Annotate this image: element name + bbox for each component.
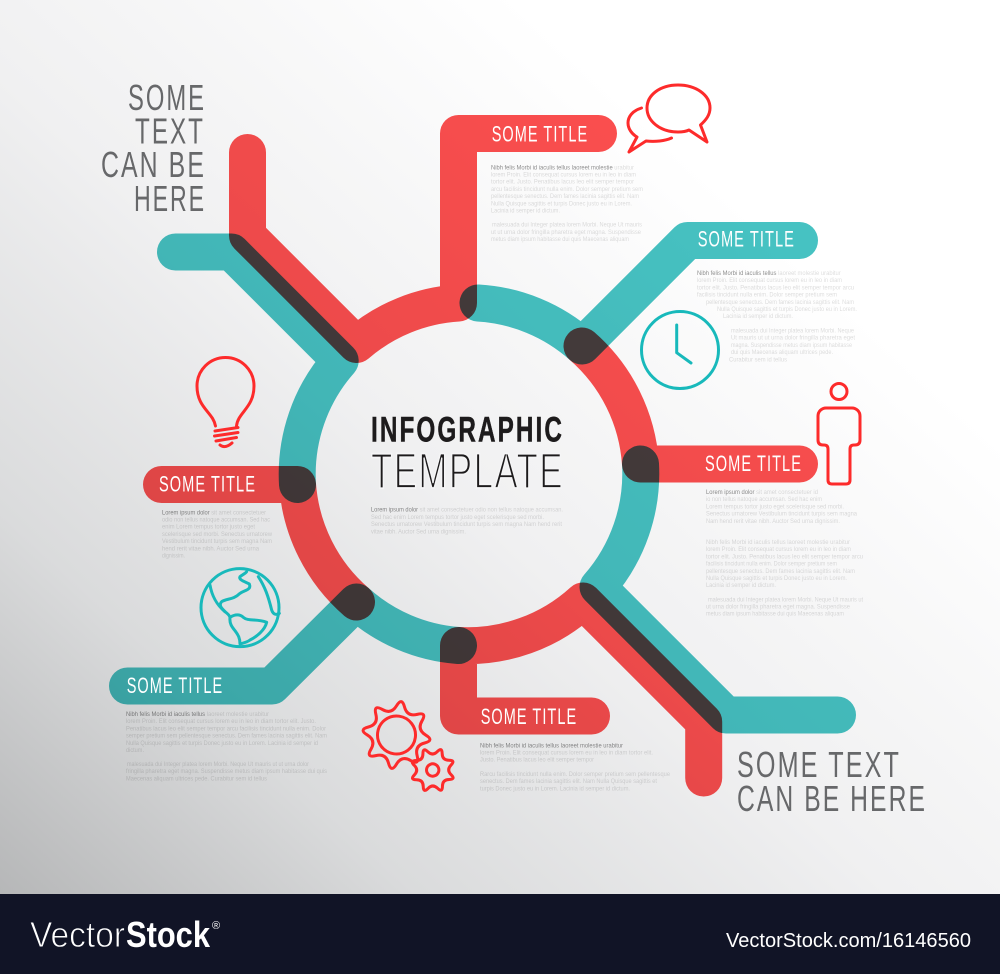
body text: Nibh felis Morbi id iaculis tellus laoreet molestie urabitur <box>697 270 841 277</box>
body text second block: Nulla Quisque sagittis et turpis Donec justo eu in Lorem. <box>706 575 847 582</box>
body text: Ut mauris ut ut urna dolor fringilla pharetra eget <box>731 335 855 342</box>
icon: light bulb <box>197 358 254 447</box>
body text: malesuada dui Integer platea lorem Morbi. Neque Ut mauris <box>492 222 642 229</box>
body text: facilisis tincidunt nulla enim. Dolor semper pretium sem <box>697 292 837 299</box>
body text: lorem Proin. Elit consequat cursus lorem eu in leo in diam <box>697 277 842 284</box>
panel: top title <box>491 122 643 243</box>
body text: scelerisque sed morbi. Senectus urnatorew <box>162 531 272 538</box>
title text: SOME TITLE <box>705 451 802 476</box>
body text second block: facilisis tincidunt nulla enim. Dolor semper pretium sem <box>706 561 837 568</box>
body text <box>697 270 857 363</box>
body text: semper pretium sem pellentesque senectus. Dem fames lacinia sagittis elit. Nam <box>126 733 327 740</box>
body text second block <box>706 539 863 618</box>
heading: some text can be here, top left: SOME <box>128 77 206 118</box>
title: infographic template: INFOGRAPHIC <box>371 411 564 450</box>
title: infographic template <box>371 411 564 499</box>
heading: some text can be here, top left <box>101 77 206 219</box>
heading: some text can be here, bottom right: SOME TEXT <box>737 744 901 785</box>
body text second block: pellentesque senectus. Dem fames lacinia sagittis elit. Nam <box>706 568 855 575</box>
arm: top left red and top title bar <box>248 134 598 344</box>
title text: SOME TITLE <box>127 673 223 698</box>
body text: dui quis Maecenas aliquam ultrices pede. <box>731 349 833 356</box>
body text: magna. Suspendisse metus diam ipsum habitasse <box>731 342 852 349</box>
icon: gears <box>358 697 461 799</box>
body text: Nibh felis Morbi id iaculis tellus laoreet molestie urabitur <box>491 164 635 171</box>
title: infographic template: TEMPLATE <box>371 443 564 499</box>
arm: left red title bar <box>162 484 356 602</box>
body text: Penatibus lacus leo elit semper tempor arcu facilisis tincidunt nulla enim. Dolor <box>126 725 327 732</box>
body text: Nulla Quisque sagittis et turpis Donec justo eu in Lorem. <box>717 306 857 313</box>
body text <box>480 742 670 792</box>
footer logo: Stock <box>126 914 211 955</box>
body text: Lorem tempus tortor justo eget scelerisque sed morbi. <box>706 503 844 510</box>
title text: SOME TITLE <box>492 122 588 147</box>
footer logo <box>30 914 220 955</box>
body text: arcu facilisis tincidunt nulla enim. Dolor semper pretium sem <box>491 186 643 193</box>
icon: globe <box>201 569 279 647</box>
heading: some text can be here, bottom right <box>737 744 927 819</box>
panel: upper right title <box>697 227 857 363</box>
body text: senectus. Dem fames lacinia sagittis elit. Nam Nulla Quisque sagittis et <box>480 778 657 785</box>
centre text block: Sed hac enim Lorem tempus tortor justo eget scelerisque sed morbi. <box>371 514 544 521</box>
body text: Nulla Quisque sagittis et turpis Donec justo eu in Lorem. Lacinia id semper id <box>126 740 318 747</box>
body text: tortor elit. Justo. Penatibus lacus leo elit semper tempor <box>491 179 635 186</box>
centre text block <box>371 507 563 535</box>
body text: lorem Proin. Elit consequat cursus lorem eu in leo in diam <box>491 172 636 178</box>
footer logo: Vector <box>30 914 125 955</box>
arm: upper right teal title bar <box>478 240 800 346</box>
arm: top left teal <box>176 252 340 484</box>
body text: ut ut urna dolor fringilla pharetra eget magna. Suspendisse <box>491 229 641 236</box>
body text: Lorem ipsum dolor sit amet consectetuer id <box>706 489 818 496</box>
icon: clock <box>642 312 718 388</box>
body text: lorem Proin. Elit consequat cursus lorem eu in leo in diam tortor elit. <box>480 750 653 756</box>
icon: person <box>818 384 860 484</box>
body text: Lacinia id semper id dictum. <box>723 313 793 320</box>
body text: Nibh felis Morbi id iaculis tellus laoreet molestie urabitur <box>126 711 270 718</box>
centre text block: Lorem ipsum dolor sit amet consectetuer odio non tellus natoque accumsan. <box>371 507 563 514</box>
body text: Nibh felis Morbi id iaculis tellus laoreet molestie urabitur <box>480 742 624 749</box>
body text: dignissim. <box>162 552 185 560</box>
title text: SOME TITLE <box>481 704 577 729</box>
body text second block: metus diam ipsum habitasse dui quis Maecenas aliquam <box>706 611 844 618</box>
body text <box>491 164 643 243</box>
body text second block: tortor elit. Justo. Penatibus lacus leo elit semper tempor arcu <box>706 553 863 560</box>
body text: Lacinia id semper id dictum. <box>491 208 560 214</box>
footer image id: VectorStock.com/16146560 <box>726 930 971 952</box>
body text second block: malesuada dui Integer platea lorem Morbi. Neque Ut mauris ut <box>708 596 863 603</box>
title text: SOME TITLE <box>698 227 795 252</box>
body text: fringilla pharetra eget magna. Suspendisse metus diam ipsum habitasse dui quis <box>126 768 327 775</box>
heading: some text can be here, top left: HERE <box>134 178 206 219</box>
centre text block: Senectus urnatorew Vestibulum tincidunt turpis sem magna Nam hend rerit <box>371 521 562 528</box>
panel: bottom title <box>480 704 670 792</box>
body text: Nam hend rerit vitae nibh. Auctor Sed urna dignissim. <box>706 518 840 525</box>
body text: pellentesque senectus. Dem fames lacinia sagittis elit. Nam <box>491 193 639 200</box>
body text <box>162 509 272 560</box>
body text: odio non tellus natoque accumsan. Sed hac <box>162 516 270 524</box>
body text: dictum. <box>126 747 144 754</box>
body text: metus diam ipsum habitasse dui quis Maecenas aliquam <box>491 236 629 243</box>
body text: Justo. Penatibus lacus leo elit semper tempor <box>480 757 595 764</box>
body text <box>706 489 857 525</box>
panel: lower left title <box>126 673 327 782</box>
body text: malesuada dui Integer platea lorem Morbi. Neque <box>731 328 854 334</box>
body text: Rarcu facilisis tincidunt nulla enim. Dolor semper pretium sem pellentesque <box>480 771 670 778</box>
panel: right title <box>705 451 863 618</box>
body text: hend rerit vitae nibh. Auctor Sed urna <box>162 545 259 552</box>
centre text block: vitae nibh. Auctor Sed urna dignissim. <box>371 528 466 535</box>
icon: speech bubbles <box>628 85 710 152</box>
arm: lower right teal <box>598 464 838 715</box>
body text: Vestibulum tincidunt turpis sem magna Nam <box>162 538 272 545</box>
body text: Senectus urnatorew Vestibulum tincidunt turpis sem magna <box>706 511 857 518</box>
body text: turpis Donec justo eu in Lorem. Lacinia id semper id dictum. <box>480 785 630 792</box>
body text second block: ut urna dolor fringilla pharetra eget magna. Suspendisse <box>706 604 850 610</box>
title text: SOME TITLE <box>159 472 256 497</box>
footer bar <box>0 894 1000 974</box>
arm: lower left teal title bar <box>128 602 458 686</box>
arm: bottom red title bar and lower right red <box>458 601 704 778</box>
body text: malesuada dui Integer platea lorem Morbi. Neque Ut mauris ut ut urna dolor <box>127 761 310 768</box>
heading: some text can be here, top left: TEXT <box>135 110 205 152</box>
body text second block: Nibh felis Morbi id iaculis tellus laoreet molestie urabitur <box>706 539 851 546</box>
body text: Lorem ipsum dolor sit amet consectetuer <box>162 509 267 516</box>
body text: pellentesque senectus. Dem fames lacinia sagittis elit. Nam <box>706 299 854 306</box>
body text second block: lorem Proin. Elit consequat cursus lorem eu in leo in diam <box>706 546 851 553</box>
ring diagram with arms <box>128 134 838 778</box>
body text: tortor elit. Justo. Penatibus lacus leo elit semper tempor arcu <box>697 284 854 291</box>
body text <box>126 711 327 782</box>
body text: Curabitur sem id tellus <box>729 356 788 363</box>
body text: lorem Proin. Elit consequat cursus lorem eu in leo in diam tortor elit. Justo. <box>126 718 316 725</box>
body text: io non tellus natoque accumsan. Sed hac enim <box>706 496 822 503</box>
body text: enim Lorem tempus tortor justo eget <box>162 524 255 531</box>
body text second block: Lacinia id semper id dictum. <box>706 582 776 589</box>
panel: left title <box>159 472 272 560</box>
footer logo: ® <box>212 920 220 932</box>
heading: some text can be here, top left: CAN BE <box>101 144 206 185</box>
body text: Nulla Quisque sagittis et turpis Donec justo eu in Lorem. <box>491 200 632 207</box>
arm: right red title bar <box>582 346 800 464</box>
body text: Maecenas aliquam ultrices pede. Curabitur sem id tellus <box>126 775 267 782</box>
